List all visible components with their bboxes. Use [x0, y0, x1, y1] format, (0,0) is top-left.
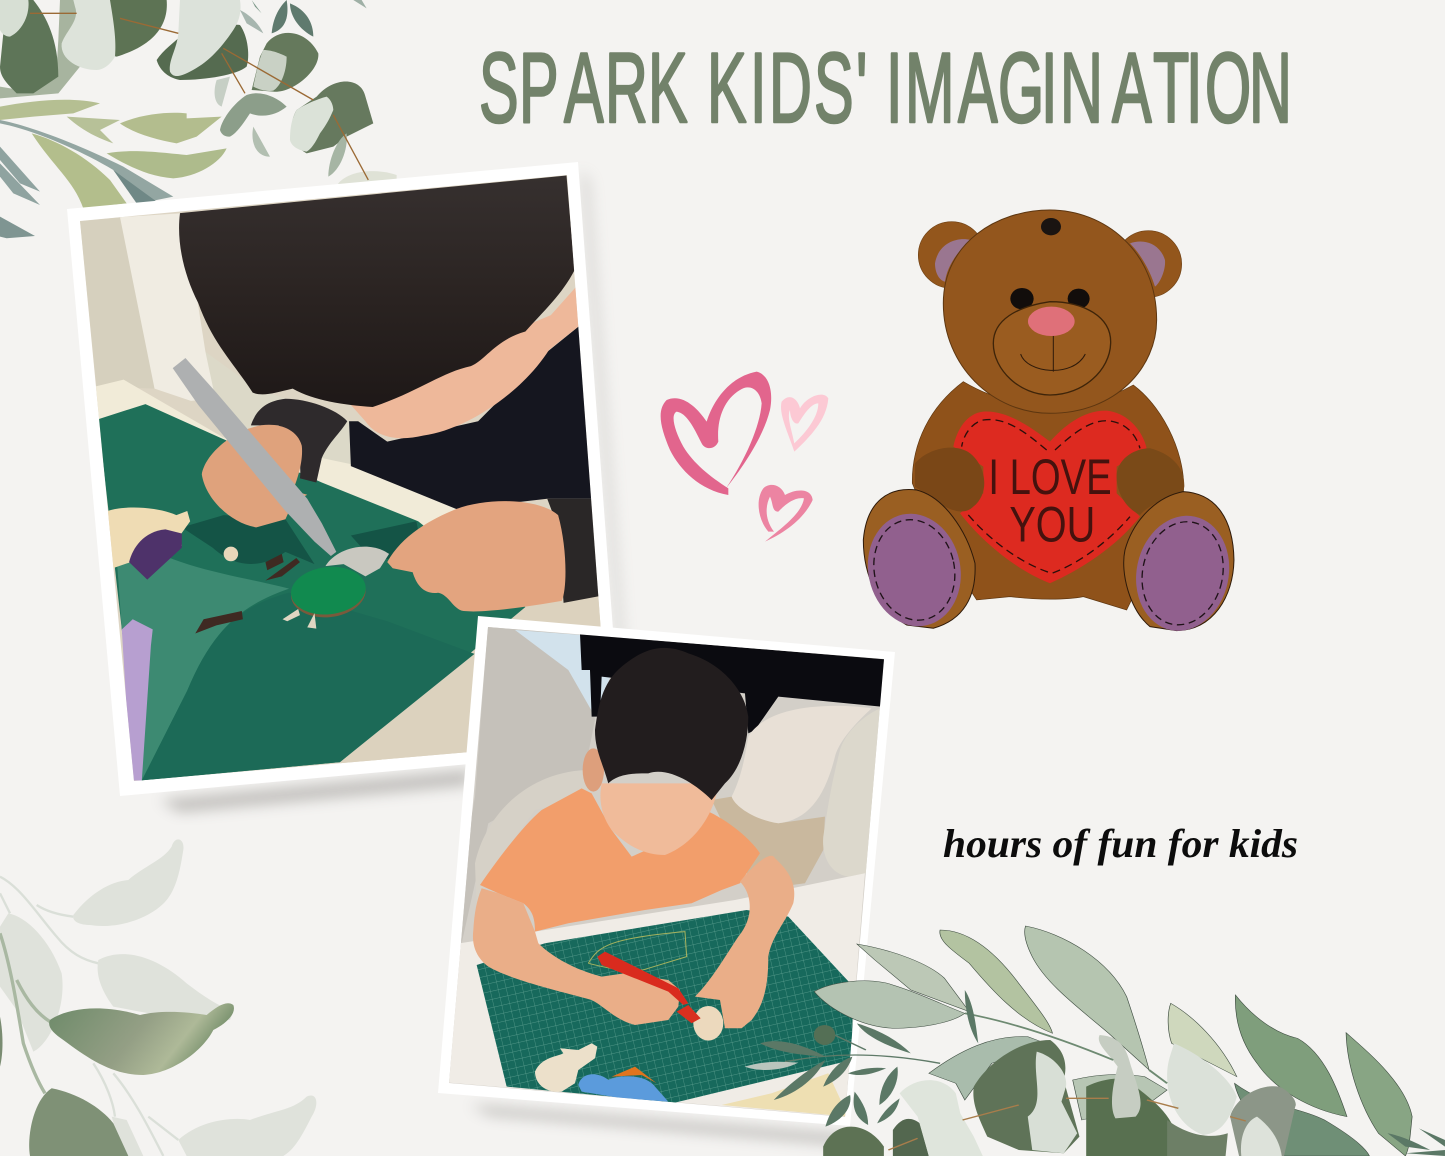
head	[943, 210, 1157, 413]
right chair	[823, 708, 880, 877]
shirt	[349, 325, 597, 509]
icon: small heart	[759, 485, 813, 542]
left chair	[475, 770, 582, 880]
caption: hours of fun for kids	[943, 821, 1298, 866]
silver marker	[173, 358, 336, 556]
right foot	[1124, 492, 1240, 640]
red marker	[597, 952, 688, 1005]
photo: boy colouring at table	[435, 610, 905, 1145]
left foot	[858, 489, 975, 635]
eyes	[1010, 288, 1090, 309]
ear	[583, 748, 604, 792]
craft pieces	[108, 508, 190, 568]
heart stitching	[962, 420, 1140, 573]
icon: large heart	[661, 372, 771, 495]
left arm	[473, 888, 680, 1025]
piano	[580, 634, 884, 733]
right arm	[695, 856, 794, 1028]
foliage: bottom left	[0, 839, 316, 1156]
ears	[918, 222, 1182, 297]
mat drawing	[588, 932, 687, 971]
heart text: YOU	[1009, 497, 1095, 553]
icon: pale heart	[781, 395, 828, 452]
purple paint marker	[122, 619, 153, 780]
title: SPARK KIDS' IMAGINATION	[479, 33, 1292, 144]
hanging hole	[1041, 218, 1061, 235]
face	[347, 282, 580, 438]
body	[912, 382, 1184, 610]
arms	[915, 448, 1184, 515]
craft pieces	[693, 1006, 723, 1041]
floor	[712, 797, 825, 890]
hair	[595, 648, 748, 800]
photo frame	[67, 162, 622, 796]
heart	[953, 411, 1147, 583]
muzzle	[993, 302, 1111, 395]
left hand	[202, 425, 307, 527]
cutting mat	[477, 910, 853, 1103]
photo: boy painting close-up	[60, 160, 632, 812]
right sleeve	[547, 498, 598, 603]
face	[600, 783, 718, 855]
foliage: bottom right	[744, 926, 1445, 1156]
cutting mat	[98, 404, 525, 780]
wooden teddy bear ornament	[858, 210, 1240, 640]
photo content	[449, 627, 884, 1117]
orange shirt	[480, 788, 760, 932]
hair	[179, 176, 574, 407]
mouth	[1021, 336, 1085, 372]
photo content	[80, 175, 601, 781]
heart text: I LOVE	[988, 449, 1112, 505]
photo frame	[438, 616, 895, 1126]
table	[449, 873, 865, 1117]
foliage: top left	[0, 0, 397, 238]
right hand	[387, 501, 565, 611]
nose	[1028, 307, 1075, 336]
hearts	[661, 372, 828, 542]
rug	[732, 706, 872, 823]
left sleeve	[251, 399, 347, 482]
